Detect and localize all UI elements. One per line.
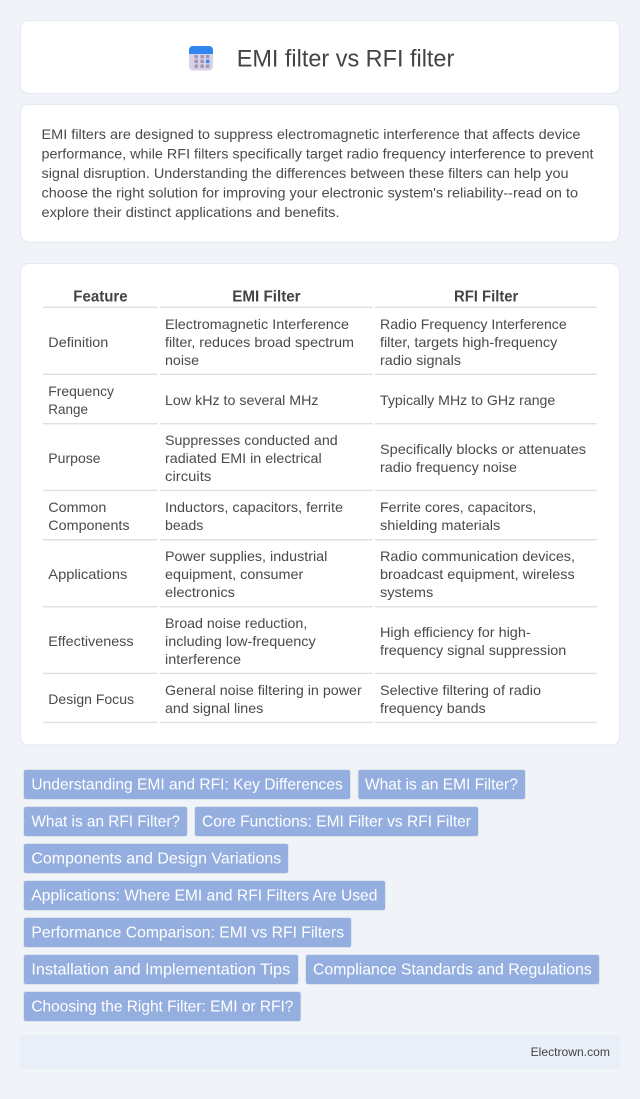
intro paragraph: choose the right solution for improving your electronic system's reliability--read on to (42, 184, 578, 200)
row: common components: Inductors, capacitors, ferrite (165, 499, 343, 515)
row: definition: Electromagnetic Interference (165, 316, 349, 332)
row: definition: Definition (48, 334, 108, 350)
title: EMI filter vs RFI filter (237, 46, 454, 72)
icon: calendar grid (189, 46, 213, 70)
row: purpose: circuits (165, 468, 211, 484)
row: applications: Radio communication devices, (380, 548, 575, 564)
intro paragraph: EMI filters are designed to suppress electromagnetic interference that affects device (42, 126, 581, 142)
intro paragraph: explore their distinct applications and benefits. (42, 204, 340, 220)
panel: header (20, 20, 620, 94)
tag: choosing the right filter (24, 992, 301, 1022)
row: applications: equipment, consumer (165, 566, 304, 582)
table header row: Feature (73, 289, 128, 306)
row: design focus: Design Focus (48, 691, 134, 707)
row: effectiveness (43, 615, 597, 674)
row: applications: Power supplies, industrial (165, 548, 327, 564)
tag: installation tips (24, 954, 298, 984)
tag: what is an RFI filter (24, 806, 188, 836)
tag: core functions: Core Functions: EMI Filter vs RFI Filter (202, 814, 472, 830)
tag: what is an EMI filter: What is an EMI Filter? (365, 776, 518, 794)
row: common components: Common (48, 499, 106, 515)
intro paragraph (42, 126, 594, 220)
tag: choosing the right filter: Choosing the Right Filter: EMI or RFI? (31, 998, 293, 1016)
tag: understanding EMI and RFI (24, 770, 350, 800)
row: common components: Ferrite cores, capacitors, (380, 499, 536, 515)
tag: what is an EMI filter (358, 770, 526, 800)
row: definition (43, 316, 597, 375)
row: frequency range: Range (48, 401, 88, 417)
row: effectiveness: frequency signal suppression (380, 642, 566, 658)
tag: understanding EMI and RFI: Understanding EMI and RFI: Key Differences (31, 776, 343, 794)
row: common components: Components (48, 517, 130, 533)
row: applications: systems (380, 584, 433, 600)
panel: introduction (20, 104, 620, 242)
tag: compliance standards (306, 954, 600, 984)
row: design focus: Selective filtering of radio (380, 682, 541, 698)
tag: components and design (24, 844, 288, 874)
footer: Electrown.com (531, 1045, 610, 1059)
row: definition: filter, reduces broad spectrum (165, 334, 354, 350)
row: common components: beads (165, 517, 203, 533)
row: definition: Radio Frequency Interference (380, 316, 567, 332)
tag: performance comparison: Performance Comparison: EMI vs RFI Filters (31, 924, 344, 942)
table header row: RFI Filter (454, 289, 518, 306)
row: effectiveness: interference (165, 651, 241, 667)
tag: applications (24, 880, 386, 910)
row: purpose: Suppresses conducted and (165, 432, 338, 448)
intro paragraph: performance, while RFI filters specifically target radio frequency interference to prevent (42, 145, 594, 161)
table header row: EMI Filter (232, 289, 301, 306)
row: design focus: General noise filtering in power (165, 682, 362, 698)
row: definition: noise (165, 352, 199, 368)
row: purpose: Purpose (48, 450, 101, 466)
panel: comparison table (20, 264, 620, 745)
row: common components: shielding materials (380, 517, 500, 533)
row: frequency range: Typically MHz to GHz range (380, 392, 556, 408)
row: effectiveness: including low-frequency (165, 633, 316, 649)
panel: topic tags (24, 770, 600, 1022)
row: design focus: frequency bands (380, 700, 486, 716)
tag: core functions (194, 806, 478, 836)
row: effectiveness: High efficiency for high- (380, 624, 531, 640)
row: effectiveness: Broad noise reduction, (165, 615, 307, 631)
row: common components (43, 499, 597, 540)
row: applications: Applications (48, 566, 127, 582)
row: design focus (43, 682, 597, 723)
row: effectiveness: Effectiveness (48, 633, 134, 649)
row: purpose: radiated EMI in electrical (165, 450, 322, 466)
row: definition: filter, targets high-frequency (380, 334, 557, 350)
intro paragraph: signal disruption. Understanding the differences between these filters can help you (42, 165, 568, 181)
row: frequency range: Frequency (48, 383, 114, 399)
tag: applications: Applications: Where EMI and RFI Filters Are Used (31, 888, 377, 904)
row: purpose: radio frequency noise (380, 459, 517, 475)
row: applications (43, 548, 597, 607)
row: applications: electronics (165, 584, 235, 600)
tag: what is an RFI filter: What is an RFI Filter? (31, 814, 180, 830)
footer (20, 1035, 620, 1069)
tag: components and design: Components and Design Variations (31, 850, 281, 868)
tag: performance comparison (24, 918, 352, 948)
tag: installation tips: Installation and Implementation Tips (31, 962, 290, 978)
row: purpose: Specifically blocks or attenuates (380, 441, 586, 457)
row: frequency range: Low kHz to several MHz (165, 392, 318, 408)
row: frequency range (43, 383, 597, 424)
row: design focus: and signal lines (165, 700, 263, 716)
row: definition: radio signals (380, 352, 461, 368)
table header row (43, 289, 597, 308)
row: applications: broadcast equipment, wireless (380, 566, 575, 582)
tag: compliance standards: Compliance Standards and Regulations (313, 962, 592, 978)
row: purpose (43, 432, 597, 491)
